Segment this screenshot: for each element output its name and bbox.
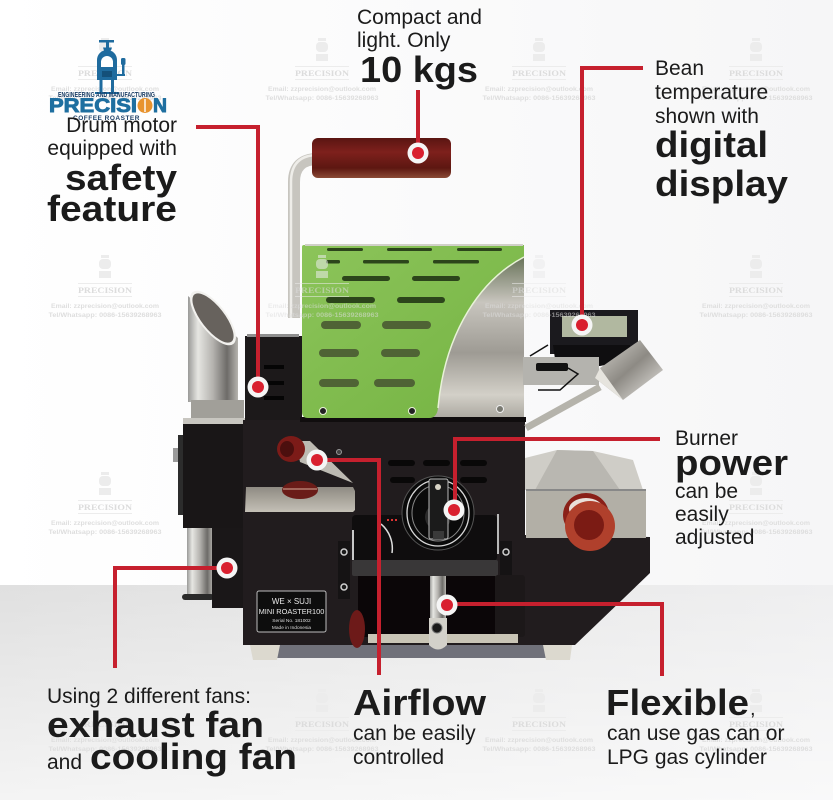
callout: gas — [436, 594, 662, 676]
red hopper knob — [563, 493, 615, 551]
text: flexible: , — [750, 698, 756, 720]
text: drum motor safety: equipped with — [47, 137, 177, 160]
nameplate: Made in Indonesia — [272, 625, 311, 631]
callout: handle / weight — [408, 90, 428, 164]
text: compact and light: light. Only — [357, 29, 451, 52]
text: drum motor safety: feature — [47, 188, 177, 229]
nameplate: WE × SUJI — [272, 597, 311, 606]
text: burner power: can be — [675, 480, 738, 503]
handle stem — [294, 159, 318, 318]
burner control panel — [338, 514, 512, 599]
text: airflow: controlled — [353, 746, 444, 769]
text: bean temperature: shown with — [655, 105, 759, 128]
text: burner power — [675, 427, 788, 549]
vents — [388, 460, 487, 483]
logo tagline: ENGINEERING AND MANUFACTURING — [58, 90, 155, 99]
bracket — [523, 357, 599, 385]
text: bean temperature: temperature — [655, 81, 768, 104]
floor shadow — [255, 643, 565, 658]
text: bean temperature — [655, 57, 788, 204]
drawer interior — [349, 560, 525, 650]
logo wordmark: N — [153, 95, 167, 117]
text: fans: and — [47, 751, 82, 774]
air damper lever — [277, 436, 353, 483]
text: fans: Using 2 different fans: — [47, 685, 251, 708]
icon: roaster mark — [95, 40, 126, 94]
nameplate — [257, 591, 326, 632]
drum screw — [496, 406, 504, 412]
logo wordmark: PRECISI — [49, 95, 137, 117]
text: bean temperature: digital — [655, 124, 768, 165]
text: airflow: can be easily — [353, 722, 476, 745]
callout: thermometer — [572, 68, 643, 336]
cooling tray plate — [245, 481, 355, 512]
bottom plate — [368, 634, 518, 643]
lower cooling tube — [182, 525, 243, 608]
roaster machine — [173, 138, 663, 660]
nameplate: Serial No. 181002 — [272, 618, 311, 624]
text: fans: exhaust fan — [47, 704, 264, 745]
text: drum motor safety — [47, 114, 177, 229]
handle grip — [312, 138, 451, 178]
text: flexible: Flexible — [606, 682, 749, 723]
text: flexible: LPG gas cylinder — [607, 746, 767, 769]
logo: Precision Coffee Roaster — [49, 40, 167, 122]
text: drum motor safety: Drum motor — [66, 114, 177, 137]
cover slots — [319, 248, 502, 387]
red drawer knob — [349, 610, 365, 648]
drum motor housing — [245, 334, 302, 426]
callout: burner — [444, 439, 660, 520]
text: burner power: Burner — [675, 427, 738, 450]
logo subline: COFFEE ROASTER — [73, 115, 140, 122]
main black body — [173, 417, 650, 645]
text: burner power: easily — [675, 503, 729, 526]
text: fans: cooling fan — [90, 736, 297, 777]
text: drum motor safety: safety — [65, 157, 177, 198]
gas pipe — [430, 576, 446, 618]
callout: airflow — [306, 450, 379, 675]
callout: drum motor — [196, 127, 268, 398]
nameplate: MINI ROASTER100 — [259, 607, 324, 616]
text: flexible — [606, 682, 784, 769]
watermark over machine — [266, 255, 596, 319]
logo wordmark — [49, 95, 167, 117]
text: compact and light: Compact and — [357, 6, 482, 29]
text: fans — [47, 685, 297, 777]
hopper — [525, 450, 646, 538]
text: burner power: power — [675, 442, 788, 483]
text: airflow — [353, 682, 487, 769]
green cover — [302, 244, 524, 418]
text: burner power: adjusted — [675, 526, 754, 549]
digital thermometer — [523, 310, 638, 390]
exhaust chimney — [182, 284, 245, 428]
text: bean temperature: display — [655, 163, 788, 204]
temperature probe — [526, 340, 663, 428]
text: compact and light — [357, 6, 482, 90]
text: airflow: Airflow — [353, 682, 487, 723]
text: flexible: can use gas can or — [607, 722, 784, 745]
burner knob — [402, 476, 474, 550]
text: bean temperature: Bean — [655, 57, 704, 80]
stainless drum — [430, 252, 524, 420]
callout: fans — [115, 558, 238, 668]
feet — [250, 645, 572, 660]
text: compact and light: 10 kgs — [360, 49, 478, 90]
